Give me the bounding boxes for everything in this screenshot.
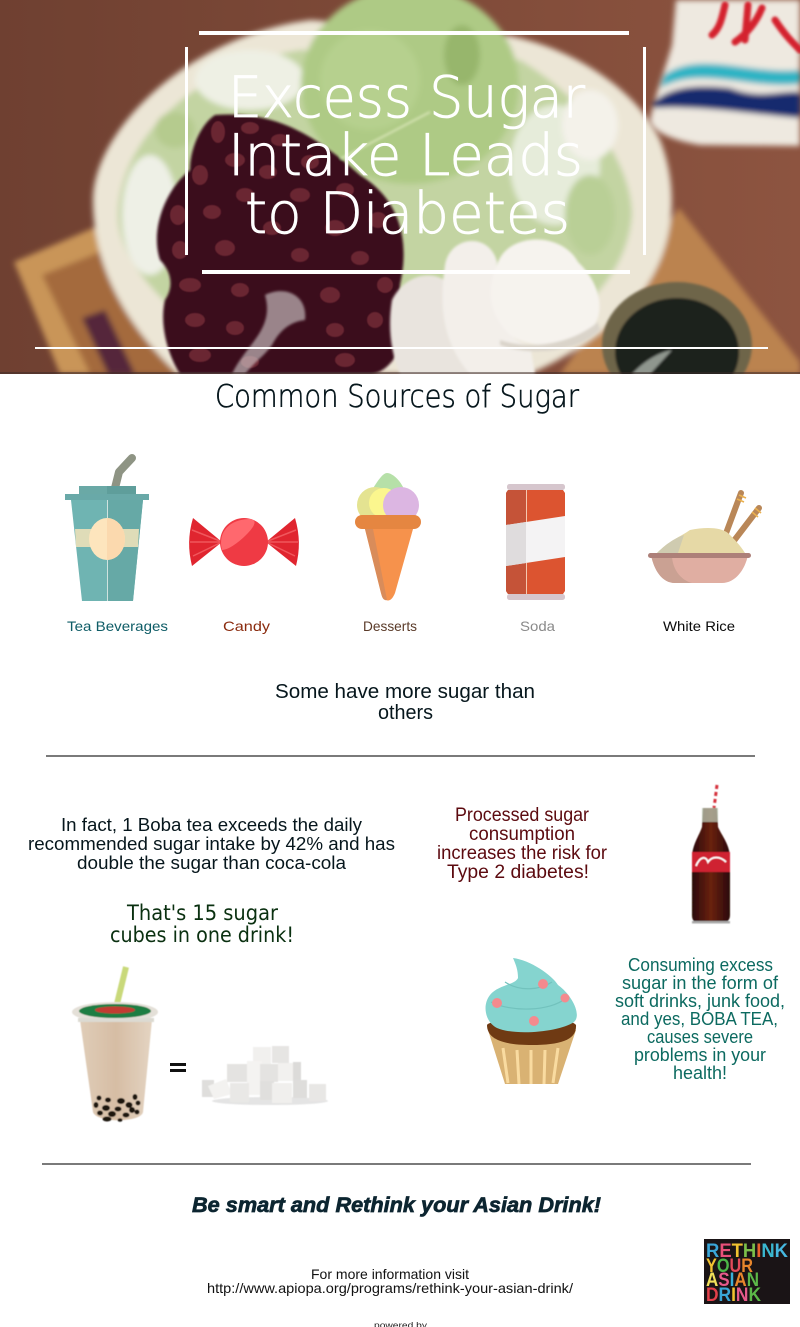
- logo: rethink your asian drink: [704, 1239, 790, 1306]
- text: some have more sugar: [275, 681, 535, 724]
- hero rule: [35, 347, 768, 349]
- slogan: Be smart and Rethink your Asian Drink!: [192, 1194, 601, 1217]
- label: tea beverages: Tea Beverages: [67, 618, 168, 634]
- title: Excess Sugar: [228, 65, 586, 131]
- logo: rethink your asian drink: ASIAN: [706, 1270, 759, 1291]
- text: processed sugar risk: Type 2 diabetes!: [447, 862, 589, 883]
- logo: rethink your asian drink: YOUR: [706, 1256, 753, 1277]
- text: more information link: [207, 1266, 573, 1296]
- equals sign: [170, 1063, 186, 1072]
- text: consuming excess sugar: [615, 955, 785, 1083]
- text: more information link: For more information visit: [311, 1266, 469, 1282]
- label: candy: Candy: [223, 618, 270, 634]
- icon: rice bowl with chopsticks: [648, 493, 761, 583]
- text: consuming excess sugar: Consuming excess: [628, 955, 773, 975]
- text: processed sugar risk: consumption: [469, 824, 575, 845]
- title: [228, 65, 586, 247]
- text: boba tea facts: recommended sugar intake by 42% and has: [28, 834, 395, 854]
- icon: soda can: [506, 484, 565, 600]
- text: that's 15 sugar cubes: That's 15 sugar: [126, 901, 278, 925]
- label: desserts: Desserts: [363, 618, 417, 634]
- text: that's 15 sugar cubes: [110, 901, 294, 947]
- label: soda: Soda: [520, 618, 555, 634]
- icon: ice cream cone: [355, 473, 421, 600]
- text: processed sugar risk: increases the risk for: [437, 843, 608, 864]
- text: processed sugar risk: [437, 805, 608, 883]
- text: boba tea facts: In fact, 1 Boba tea exceeds the daily: [61, 815, 362, 835]
- text: consuming excess sugar: health!: [673, 1063, 727, 1083]
- title: Intake Leads: [228, 123, 583, 189]
- text: some have more sugar: others: [378, 702, 433, 724]
- text: processed sugar risk: Processed sugar: [455, 805, 590, 826]
- text: consuming excess sugar: causes severe: [647, 1027, 753, 1047]
- label: white rice: White Rice: [663, 618, 735, 634]
- title frame: [185, 31, 646, 274]
- text: boba tea facts: [28, 815, 395, 873]
- icon: tea beverage cup: [65, 458, 149, 601]
- image: sugar cubes: [202, 1046, 328, 1105]
- logo: rethink your asian drink: RETHINK: [706, 1241, 788, 1262]
- text: that's 15 sugar cubes: cubes in one drink!: [110, 923, 294, 947]
- image: coca-cola bottle: [692, 785, 730, 924]
- title: to Diabetes: [245, 181, 570, 247]
- heading: common sources of sugar: Common Sources of Sugar: [215, 379, 579, 415]
- hero banner photo: shaved ice bowl: [0, 0, 800, 408]
- text: consuming excess sugar: soft drinks, junk food,: [615, 991, 785, 1011]
- icon: cupcake: [486, 958, 577, 1084]
- image: boba milk tea: [72, 967, 158, 1122]
- text: consuming excess sugar: sugar in the form of: [622, 973, 779, 993]
- logo: rethink your asian drink: DRINK: [706, 1285, 761, 1306]
- text: some have more sugar: Some have more sugar than: [275, 681, 535, 703]
- text: consuming excess sugar: and yes, BOBA TEA,: [621, 1009, 778, 1029]
- text: consuming excess sugar: problems in your: [634, 1045, 766, 1065]
- icon: candy: [189, 518, 299, 566]
- text: boba tea facts: double the sugar than coca-cola: [77, 853, 347, 873]
- text: more information link: http://www.apiopa.org/programs/rethink-your-asian-drink/: [207, 1280, 573, 1296]
